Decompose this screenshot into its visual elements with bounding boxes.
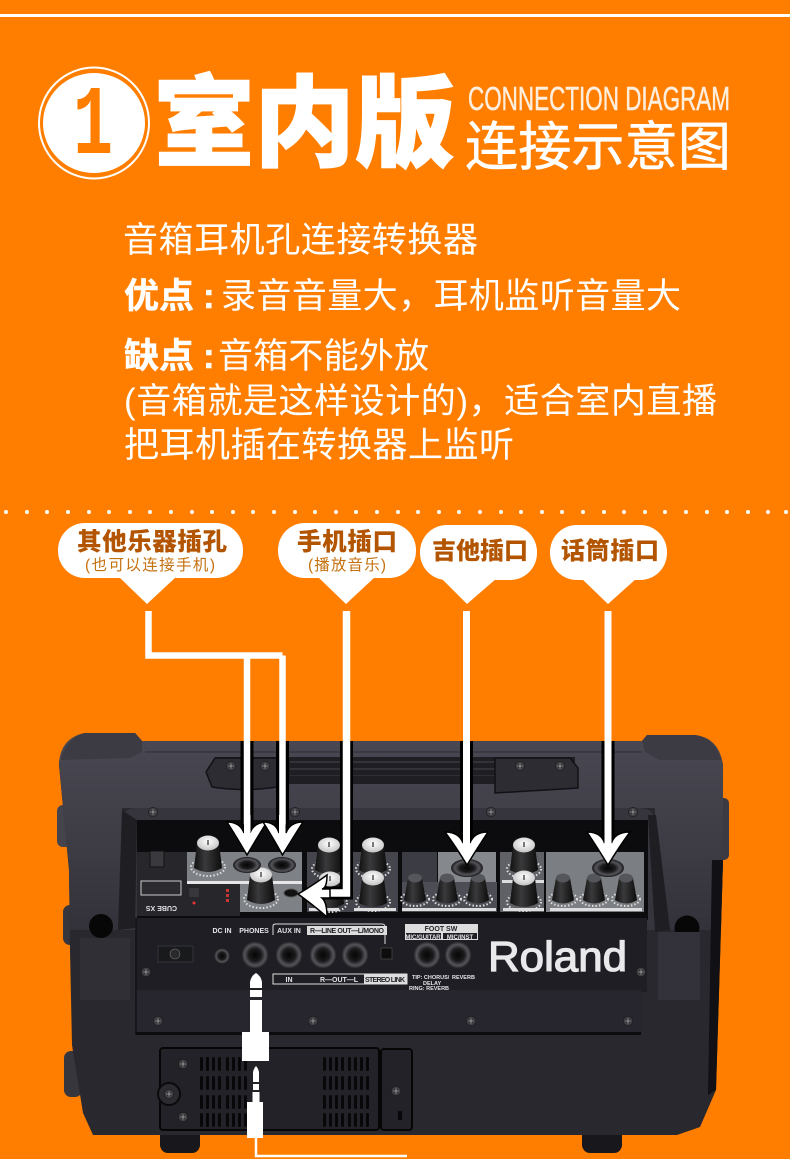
carry handle [206,757,578,793]
callout: phone jack: (播放音乐) [308,556,386,574]
side knobs and feet [57,798,729,1153]
front panel: PHONES [239,928,269,935]
callout: phone jack [278,523,416,604]
adapter plug: 3.5mm [247,1066,263,1138]
callout: mic jack [550,525,667,604]
subtitle chinese: 连接示意图 [465,118,731,177]
text block: description: 缺点 [124,337,194,376]
callout: mic jack: 话筒插口 [561,537,659,565]
front panel: AUX IN [277,928,301,935]
callout: phone jack: 手机插口 [297,528,397,556]
text block: description: 音箱不能外放 [218,337,429,376]
text block: description: 录音音量大，耳机监听音量大 [221,277,681,316]
top white rule [0,14,790,17]
control panels [137,851,644,916]
badge: number 1: 1 [73,72,113,183]
cabinet top [59,733,723,930]
front panel: R—OUT—L [320,977,359,984]
front panel: IN [286,977,292,984]
text block: description: : [203,277,215,316]
callout: other instruments: 其他乐器插孔 [77,528,228,556]
text block: description: (音箱就是这样设计的)，适合室内直播 [124,382,717,421]
control recess [122,807,655,930]
callout: other instruments [58,523,243,604]
front panel: TIP: CHORUS/ [412,975,450,981]
adapter plug: 6.35mm [242,973,269,1061]
badge: number 1 [39,68,149,183]
text block: description [123,221,717,465]
arrow: guitar jack [445,611,488,865]
title: 室内版 [154,68,455,179]
battery door [158,1048,412,1130]
front panel: RING: REVERB [409,986,449,992]
arrow: mic jack [587,611,630,865]
control panels: CUBE XS [146,904,177,911]
output cable [256,1138,407,1156]
amplifier [57,733,729,1153]
arrow: phone jack [298,611,346,917]
front panel [136,918,647,1035]
dotted divider [4,510,788,514]
front panel: DELAY [423,981,441,987]
text block: description: 音箱耳机孔连接转换器 [123,221,478,260]
callout: other instruments: (也可以连接手机) [85,556,215,574]
knobs [191,836,640,912]
arrows: other instruments [148,611,303,855]
front panel: MIC/GUITAR [405,935,441,941]
front panel: MIC/INST [447,935,473,941]
front panel: DC IN [212,928,232,935]
input jacks [233,857,624,897]
cabinet [59,733,723,1135]
front panel: REVERB [452,975,475,981]
Roland logo: Roland [488,933,627,980]
front panel: R—LINE OUT—L/MONO [310,928,385,935]
text block: description: 把耳机插在转换器上监听 [124,426,514,465]
callout: guitar jack [420,525,537,604]
front panel: STEREO LINK [365,977,405,984]
front panel: FOOT SW [425,926,458,933]
text block: description: 优点 [124,277,194,316]
callout: guitar jack: 吉他插口 [432,538,528,565]
text block: description: : [203,337,215,376]
side flanges and holes [80,810,723,1095]
